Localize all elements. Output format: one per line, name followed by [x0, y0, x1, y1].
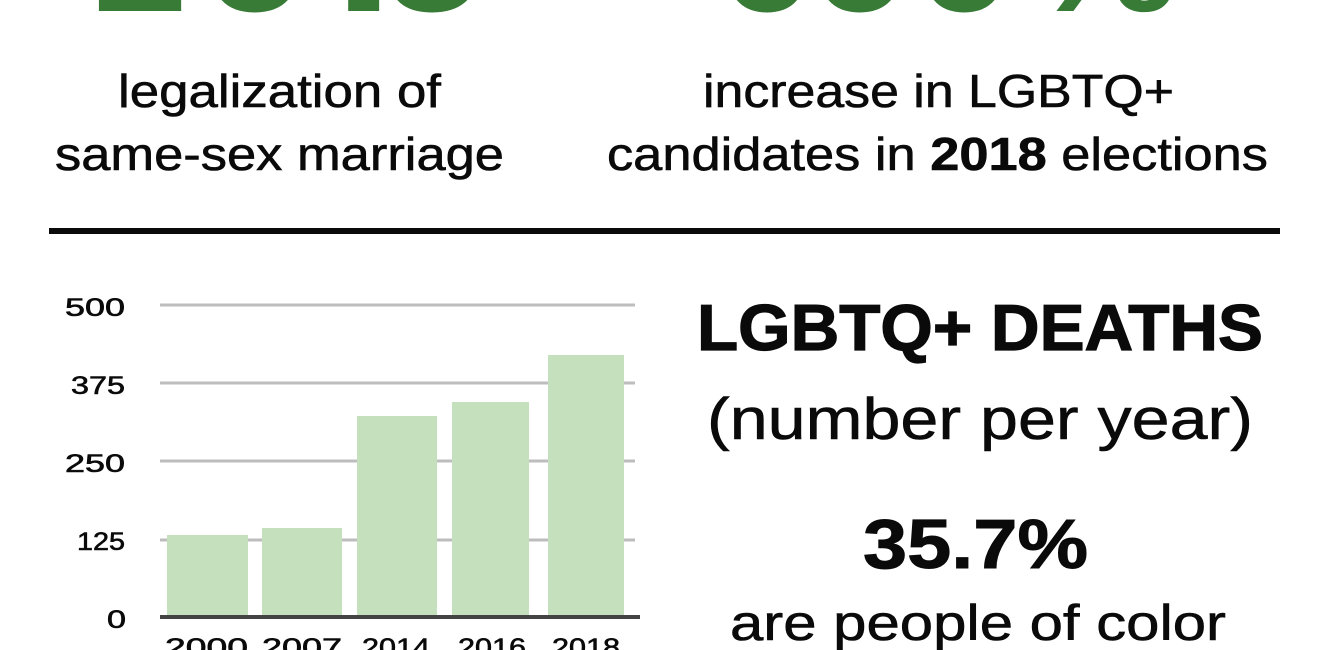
- stat: 35.7%: 35.7%: [863, 505, 1088, 583]
- subheading: number per year: (number per year): [707, 387, 1253, 452]
- bars: [167, 355, 624, 617]
- y axis labels: [65, 294, 126, 634]
- caption: legalization of same-sex marriage: same-sex marriage: [55, 128, 504, 180]
- heading: LGBTQ+ deaths: LGBTQ+ DEATHS: [697, 291, 1263, 364]
- caption: are people of color: are people of color: [730, 595, 1226, 650]
- y axis labels: 500: [65, 294, 125, 322]
- bar chart: LGBTQ+ deaths per year: [65, 294, 640, 650]
- caption: increase in LGBTQ+ candidates: candidates in 2018 elections: [607, 128, 1268, 180]
- big stat: 600%: [720, 0, 1178, 43]
- big stat: 2015: [93, 0, 481, 43]
- caption: legalization of same-sex marriage: legalization of: [118, 65, 441, 117]
- y axis labels: 375: [71, 372, 125, 400]
- caption: increase in LGBTQ+ candidates: increase in LGBTQ+: [703, 65, 1174, 117]
- x axis labels: [165, 634, 620, 650]
- caption: legalization of same-sex marriage: [55, 65, 504, 180]
- y axis labels: 125: [77, 528, 125, 556]
- y axis labels: 0: [107, 606, 126, 634]
- y axis labels: 250: [65, 450, 125, 478]
- caption: increase in LGBTQ+ candidates: [607, 65, 1268, 180]
